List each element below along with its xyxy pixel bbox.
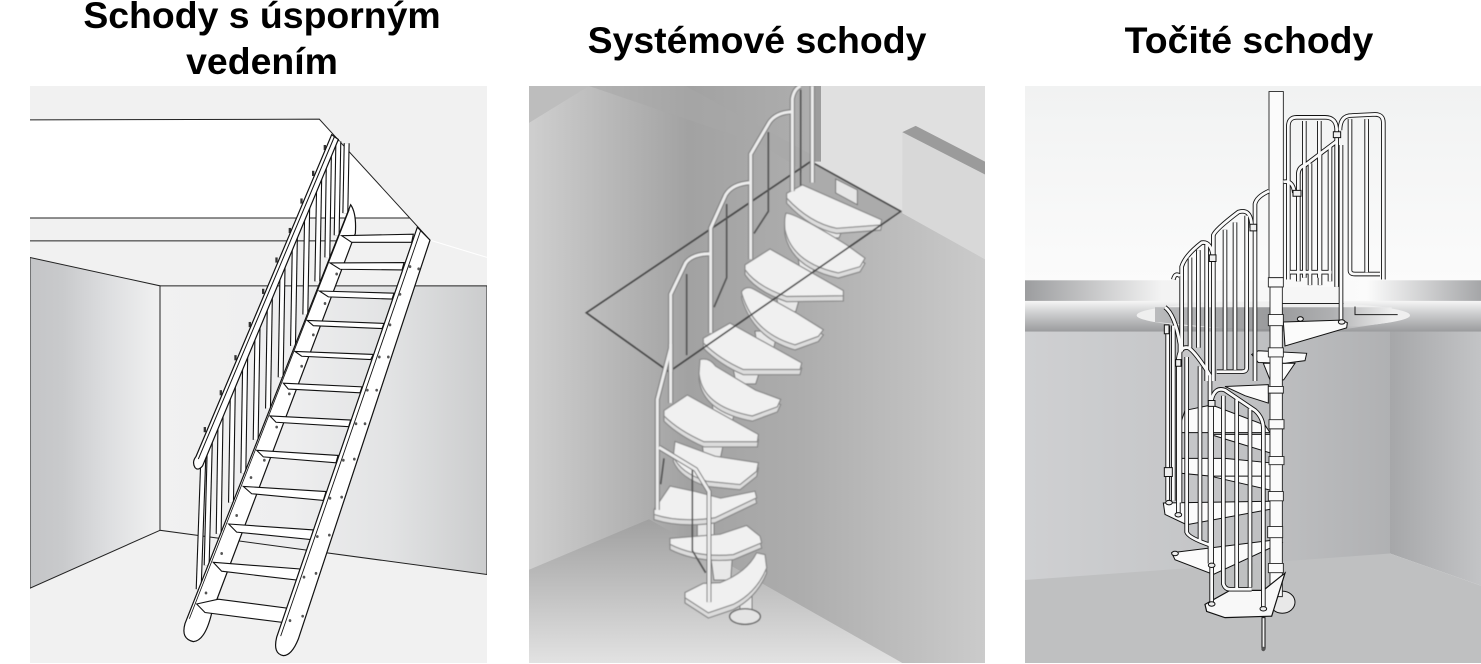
left wall — [1025, 329, 1390, 584]
stringer: left — [184, 205, 356, 642]
upper left light band — [529, 86, 589, 123]
base disc — [1270, 591, 1295, 613]
treads — [197, 234, 413, 622]
handrail — [194, 135, 338, 469]
ceiling slab edge — [1025, 280, 1481, 301]
raised block — [902, 126, 985, 259]
notch detail — [836, 179, 857, 205]
stairwell opening — [1137, 302, 1410, 332]
title: Schody s úsporným vedením: vedením — [186, 40, 338, 82]
floor — [529, 519, 902, 663]
rail clamps and bolts — [1164, 132, 1345, 611]
tread edges — [654, 190, 882, 618]
back wall — [160, 286, 487, 575]
landing edge — [1278, 287, 1398, 315]
opening shaded edge — [792, 162, 901, 228]
central supports — [697, 225, 844, 615]
dark balusters — [661, 90, 801, 573]
far wall, light — [811, 86, 985, 259]
handrails — [657, 86, 812, 602]
title: Systémové schody: Systémové schody — [588, 19, 927, 61]
stringer: right — [276, 227, 430, 656]
floor — [1025, 553, 1481, 663]
railings — [1165, 114, 1383, 608]
ceiling opening — [30, 119, 418, 228]
ceiling slab face — [1025, 301, 1481, 332]
treads — [654, 185, 882, 613]
opening outline — [586, 162, 901, 372]
opening outlines — [30, 119, 487, 257]
balusters — [199, 141, 347, 589]
floor anchor rod — [1261, 618, 1265, 651]
upper wall shading — [589, 86, 821, 182]
title: Točité schody: Točité schody — [1125, 19, 1374, 61]
panel: space-saving stairs illustration — [30, 86, 487, 663]
far wall dark edge — [812, 86, 821, 162]
stair assembly — [586, 86, 901, 624]
central column — [1268, 92, 1284, 597]
left wall — [30, 257, 160, 588]
panel: system stairs illustration — [529, 86, 985, 663]
right wall — [1390, 322, 1481, 586]
bottom tread — [1205, 573, 1285, 618]
base plate — [730, 609, 760, 624]
panel: spiral stairs illustration — [1025, 86, 1481, 663]
treads — [1163, 320, 1347, 575]
